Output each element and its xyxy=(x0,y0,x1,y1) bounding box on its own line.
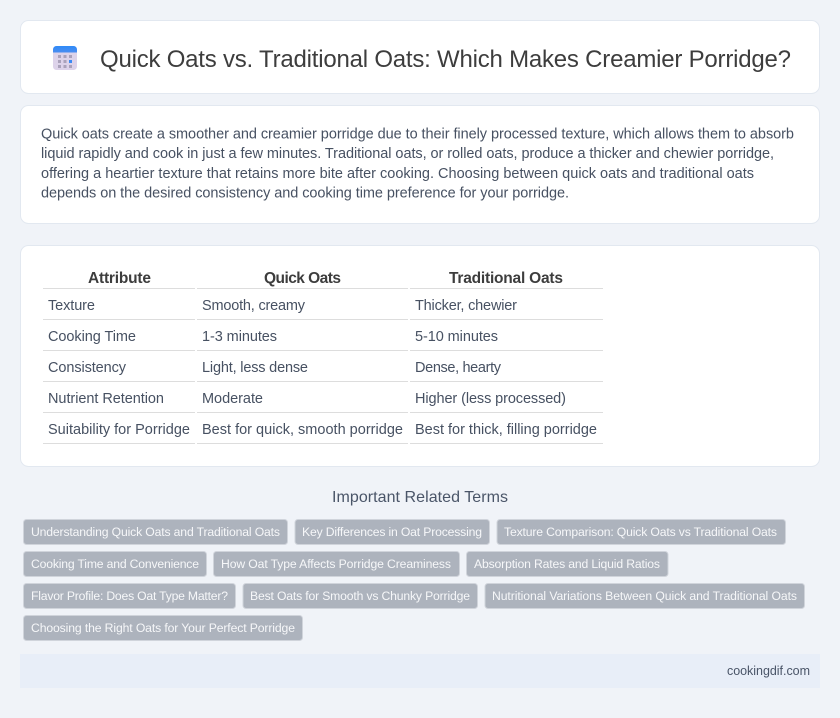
table row: consistency xyxy=(43,360,603,382)
table header: Quick Oats xyxy=(264,270,341,287)
table row: suitability for porridge: Best for thick, filling porridge xyxy=(415,422,597,438)
tag xyxy=(24,552,206,576)
tag: Flavor Profile: Does Oat Type Matter? xyxy=(31,589,228,603)
tag xyxy=(466,552,668,576)
heading: important related terms: Important Related Terms xyxy=(332,489,508,506)
table row: texture xyxy=(43,298,603,320)
tag xyxy=(24,520,288,544)
text block: summary xyxy=(41,126,794,202)
text block: summary: depends on the desired consistency and cooking time preference for your porridge. xyxy=(41,186,569,202)
tag: Texture Comparison: Quick Oats vs Traditional Oats xyxy=(504,525,777,539)
tag: Absorption Rates and Liquid Ratios xyxy=(474,557,660,571)
tag xyxy=(497,520,786,544)
tag: Key Differences in Oat Processing xyxy=(302,525,482,539)
table row: cooking time: Cooking Time xyxy=(48,329,136,345)
tag xyxy=(24,616,302,640)
title: Quick Oats vs. Traditional Oats: Which Makes Creamier Porridge? xyxy=(100,46,791,73)
table row: texture: Thicker, chewier xyxy=(415,298,517,314)
table row: cooking time: 5-10 minutes xyxy=(415,329,498,345)
panel: summary paragraph xyxy=(20,106,820,224)
panel: comparison table xyxy=(20,246,820,466)
tag xyxy=(24,584,236,608)
table row: cooking time: 1-3 minutes xyxy=(202,329,277,345)
related term tags xyxy=(24,520,804,640)
table row: nutrient retention xyxy=(43,391,603,412)
tag xyxy=(295,520,490,544)
table row: cooking time xyxy=(43,329,603,350)
footer bar xyxy=(20,654,820,688)
tag: Cooking Time and Convenience xyxy=(31,557,199,571)
tag xyxy=(214,552,460,576)
text block: summary: Quick oats create a smoother and creamier porridge due to their finely processed texture, which allows them to absorb xyxy=(41,126,794,142)
tag: How Oat Type Affects Porridge Creaminess xyxy=(221,557,451,571)
table header xyxy=(43,270,603,288)
table row: consistency: Consistency xyxy=(48,360,127,376)
table row: nutrient retention: Nutrient Retention xyxy=(48,391,164,407)
tag: Best Oats for Smooth vs Chunky Porridge xyxy=(250,589,470,603)
table header: Attribute xyxy=(88,270,151,287)
footer source text: cookingdif.com xyxy=(727,664,810,678)
icon: calendar xyxy=(53,46,77,70)
tag: Understanding Quick Oats and Traditional Oats xyxy=(31,525,280,539)
table row: suitability for porridge xyxy=(43,422,603,444)
table row: texture: Smooth, creamy xyxy=(202,298,306,314)
table row: consistency: Light, less dense xyxy=(202,360,308,376)
table row: nutrient retention: Higher (less processed) xyxy=(415,391,566,407)
table header: Traditional Oats xyxy=(449,270,563,287)
table row: suitability for porridge: Suitability for Porridge xyxy=(48,422,190,438)
text block: summary: liquid rapidly and cook in just a few minutes. Traditional oats, or rolled oats, produce a thicker and chewier porridge, xyxy=(41,146,774,162)
tag xyxy=(485,584,804,608)
table row: nutrient retention: Moderate xyxy=(202,391,263,407)
panel: header xyxy=(20,20,820,94)
table row: suitability for porridge: Best for quick, smooth porridge xyxy=(202,422,403,438)
text block: summary: offering a heartier texture that retains more bite after cooking. Choosing between quick oats and traditional oats xyxy=(41,166,754,182)
tag: Nutritional Variations Between Quick and Traditional Oats xyxy=(492,589,797,603)
tag: Choosing the Right Oats for Your Perfect Porridge xyxy=(31,621,295,635)
table row: texture: Texture xyxy=(48,298,95,314)
table row: consistency: Dense, hearty xyxy=(415,360,502,376)
tag xyxy=(243,584,478,608)
